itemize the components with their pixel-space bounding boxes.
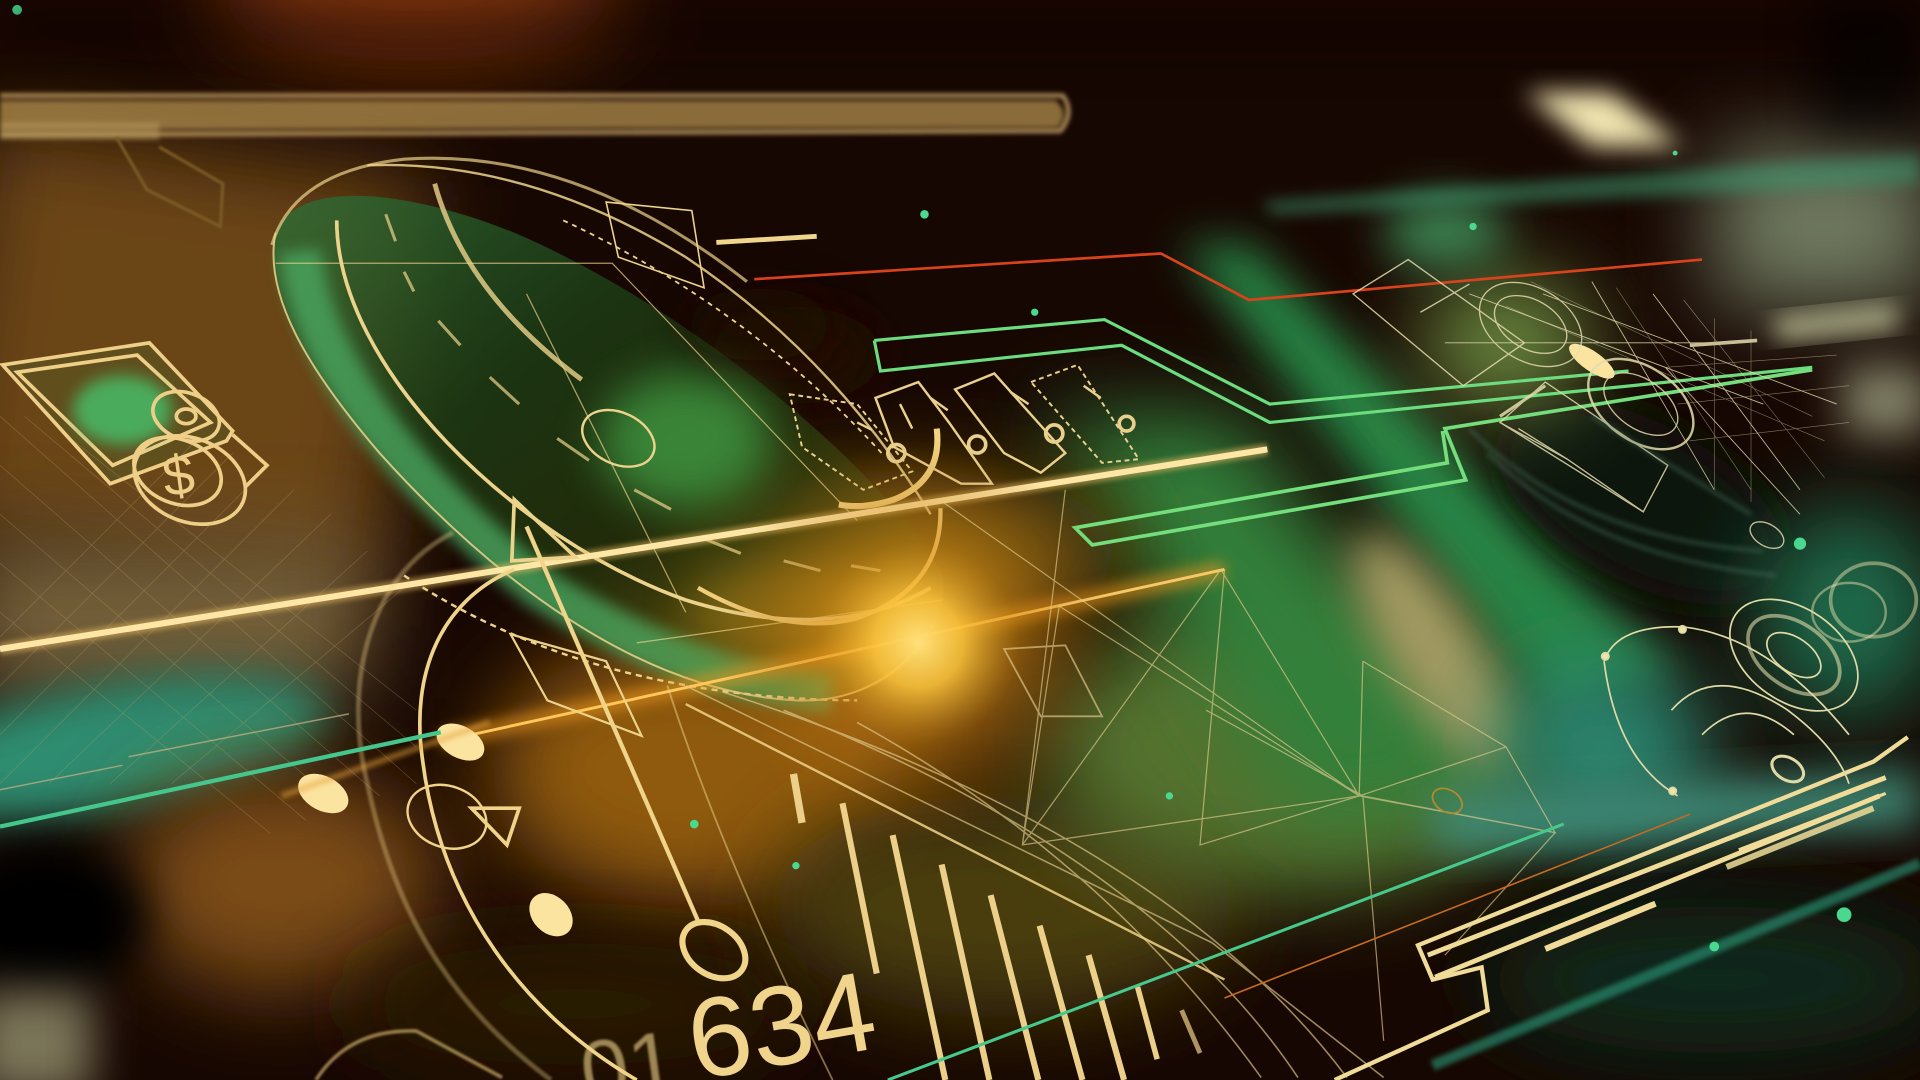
main cream diagonal line: [0, 449, 1267, 649]
green circuit path lower: [1075, 370, 1812, 545]
large numerals: [575, 947, 885, 1080]
hexagon chain chart nodes: [790, 365, 1139, 490]
red circuit line: [754, 253, 1702, 300]
blurred bottom left label: [316, 1031, 502, 1080]
diagonal mesh texture left: [0, 416, 416, 833]
dial needle hook: [839, 429, 937, 506]
small orange ring: [1428, 783, 1467, 818]
vignette edges: [0, 0, 1920, 135]
central glow: [716, 441, 1120, 845]
upper right wireframe target cluster: [1353, 260, 1849, 554]
geometric wireframe web: [686, 490, 1555, 1078]
bottom right circuit path: [1335, 737, 1908, 1080]
lower left arcs and pendulum: [358, 527, 1224, 1080]
dollar sign: $: [159, 442, 198, 509]
orange light streak: [441, 569, 1224, 741]
bar chart perspective stripes: [793, 774, 1200, 1080]
green circuit path upper: [874, 320, 1812, 422]
radar dial: green disc with concentric arcs: [272, 158, 943, 701]
bright oval nodes: [291, 338, 1620, 945]
dark swirl arcs: [1469, 416, 1776, 576]
right side concentric rings: [1602, 563, 1916, 796]
blurred corner tab outline: [116, 137, 223, 227]
orange fine line: [1224, 814, 1690, 998]
small diamond and triangle outlines: [511, 500, 642, 736]
short cream dash: [716, 236, 817, 242]
wallet and dollar coin icon: [2, 343, 267, 540]
lower green line: [888, 824, 1564, 1080]
bottom right teal streak: [1433, 863, 1920, 1065]
blurred top bar: [0, 96, 1068, 140]
green and grey left lines: [0, 714, 490, 827]
